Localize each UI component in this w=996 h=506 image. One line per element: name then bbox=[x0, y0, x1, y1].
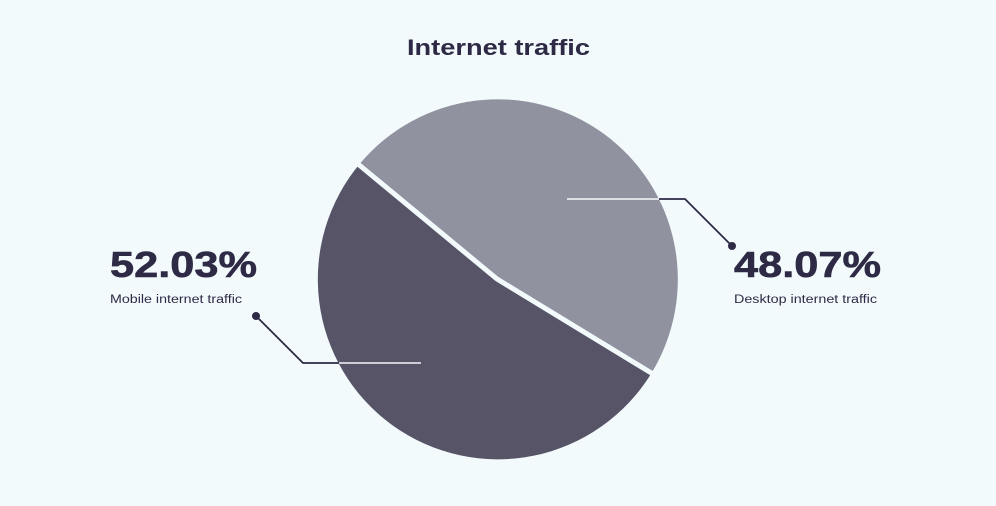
callout: mobile label: Mobile internet traffic bbox=[110, 294, 242, 306]
callout: mobile leader line bbox=[252, 312, 421, 363]
pie slice: mobile internet traffic bbox=[318, 163, 651, 459]
callout: desktop label: Desktop internet traffic bbox=[734, 294, 877, 306]
pie slice: desktop internet traffic bbox=[360, 99, 678, 373]
slice separator bbox=[358, 164, 653, 374]
callout: mobile value: 52.03% bbox=[110, 244, 257, 285]
title: Internet traffic bbox=[407, 35, 590, 60]
pie chart bbox=[318, 99, 678, 459]
callout: desktop value: 48.07% bbox=[734, 244, 881, 285]
callout: desktop leader line bbox=[567, 199, 736, 250]
